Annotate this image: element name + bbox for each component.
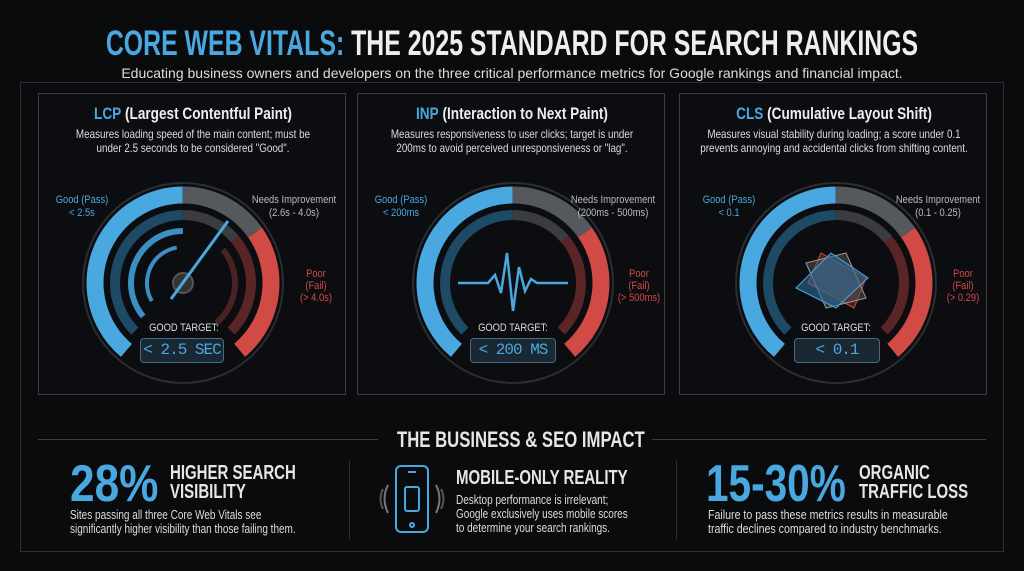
labels: LCP: < 2.5s — [69, 207, 95, 219]
panel: CLS: CLS (Cumulative Layout Shift) — [736, 104, 932, 123]
labels: CLS: < 0.1 — [718, 207, 740, 219]
labels: CLS: Good (Pass) — [703, 194, 755, 206]
labels: LCP: Good (Pass) — [56, 194, 108, 206]
stat: 15-30%: Failure to pass these metrics results in measurable — [708, 508, 948, 522]
stat: 28%: VISIBILITY — [170, 481, 246, 503]
panel: LCP: (2.6s - 4.0s) — [269, 207, 319, 219]
panel: INP: < 200 MS — [479, 341, 547, 359]
labels: INP: < 200ms — [383, 207, 419, 219]
gauge: LCP — [82, 182, 284, 384]
stat: mobile-only: MOBILE-ONLY REALITY — [456, 467, 628, 489]
labels: CLS — [703, 194, 755, 219]
frame — [20, 82, 1004, 552]
icon: mobile phone — [380, 465, 444, 533]
panel: INP: (200ms - 500ms) — [578, 207, 648, 219]
stat: 15-30% — [706, 455, 968, 536]
panel: CLS: Measures visual stability during loading; a score under 0.1 — [707, 127, 961, 141]
panel: LCP: Needs Improvement — [252, 194, 336, 206]
panel: CLS: (> 0.29) — [947, 292, 979, 304]
panel: CLS: (0.1 - 0.25) — [915, 207, 961, 219]
panel: INP: Needs Improvement — [571, 194, 655, 206]
panel: LCP — [38, 93, 346, 395]
panel: CLS — [679, 93, 987, 395]
stat: mobile-only: to determine your search rankings. — [456, 521, 610, 535]
stat: 28% — [70, 455, 296, 536]
target: INP: GOOD TARGET: — [478, 322, 548, 334]
stat: 28%: Sites passing all three Core Web Vitals see — [70, 508, 261, 522]
gauge: CLS — [735, 182, 937, 384]
title: CORE WEB VITALS: THE 2025 STANDARD FOR SEARCH RANKINGS — [106, 24, 918, 63]
gauge: INP — [412, 182, 614, 384]
panel: CLS: prevents annoying and accidental clicks from shifting content. — [700, 141, 968, 155]
panel: LCP: Poor — [306, 268, 326, 280]
labels: LCP — [56, 194, 108, 219]
subtitle: Educating business owners and developers on the three critical performance metrics for Google rankings and financial impact. — [121, 65, 903, 81]
stat: 15-30%: TRAFFIC LOSS — [859, 481, 968, 503]
panel: LCP: < 2.5 SEC — [143, 341, 221, 359]
panel: INP — [357, 93, 665, 395]
stat: 28%: 28% — [70, 455, 158, 513]
stat: mobile-only — [456, 467, 628, 535]
text: significantly higher visibility than those failing them. — [70, 522, 296, 536]
panel: LCP: LCP (Largest Contentful Paint) — [94, 104, 292, 123]
panel: INP: Poor — [629, 268, 649, 280]
panel: INP: Measures responsiveness to user clicks; target is under — [391, 127, 633, 141]
panel: LCP: Measures loading speed of the main content; must be — [76, 127, 310, 141]
panel: INP: (Fail) — [628, 280, 650, 292]
panel: LCP: (> 4.0s) — [300, 292, 332, 304]
panel: CLS: (Fail) — [952, 280, 974, 292]
stat: mobile-only: Desktop performance is irrelevant; — [456, 493, 608, 507]
text: traffic declines compared to industry benchmarks. — [708, 522, 942, 536]
panel: INP: 200ms to avoid perceived unresponsiveness or "lag". — [396, 141, 628, 155]
panel: CLS: < 0.1 — [815, 341, 858, 359]
stat: 15-30%: 15-30% — [706, 455, 846, 513]
target: LCP: GOOD TARGET: — [149, 322, 219, 334]
labels: INP: Good (Pass) — [375, 194, 427, 206]
stat: 15-30%: ORGANIC — [859, 462, 930, 484]
stat: 28%: HIGHER SEARCH — [170, 462, 296, 484]
target: CLS: GOOD TARGET: — [801, 322, 871, 334]
panel: INP: (> 500ms) — [618, 292, 660, 304]
panel: CLS: Poor — [953, 268, 973, 280]
stat: mobile-only: Google exclusively uses mobile scores — [456, 507, 628, 521]
labels: INP — [375, 194, 427, 219]
panel: INP: INP (Interaction to Next Paint) — [416, 104, 608, 123]
panel: LCP: under 2.5 seconds to be considered "Good". — [97, 141, 289, 155]
panel: CLS: Needs Improvement — [896, 194, 980, 206]
panel: LCP: (Fail) — [305, 280, 327, 292]
section heading: business impact: THE BUSINESS & SEO IMPACT — [397, 427, 645, 452]
